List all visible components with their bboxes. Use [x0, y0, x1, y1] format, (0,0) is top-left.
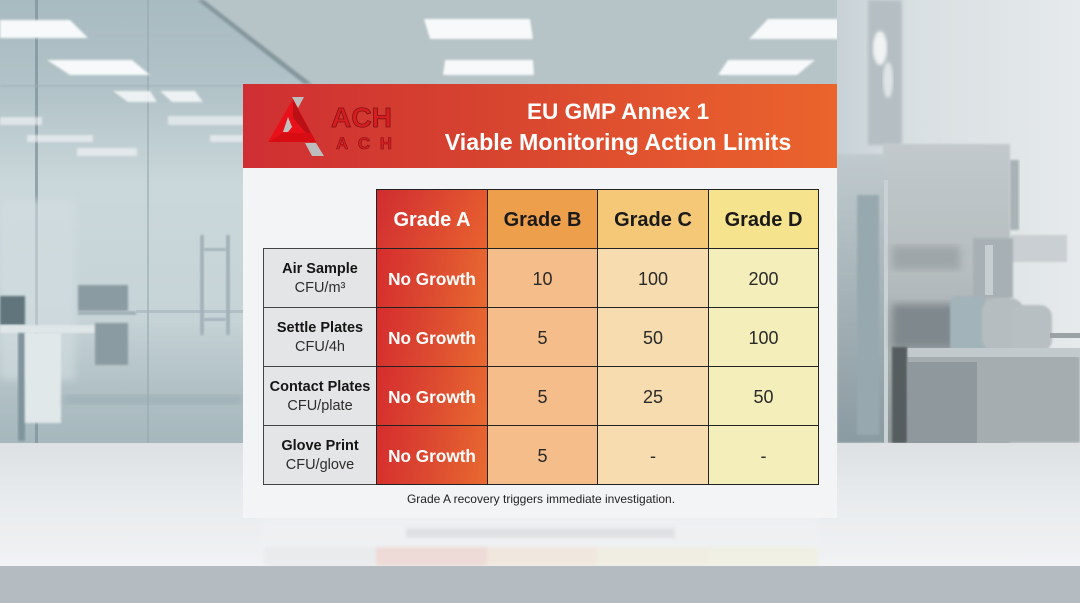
row: Settle Plates: [263, 308, 819, 366]
footnote: Grade A recovery triggers immediate investigation.: [407, 492, 675, 506]
right room and machinery: [837, 0, 1080, 443]
row: Contact Plates: CFU/plate: [287, 398, 353, 414]
row: Air Sample: 100: [638, 268, 668, 288]
logo: ACH: ACH: [336, 134, 392, 153]
logo: ACH: ACH: [331, 102, 392, 133]
row: Contact Plates: No Growth: [388, 386, 476, 406]
row: Contact Plates: 25: [643, 386, 663, 406]
row: Air Sample: Air Sample: [282, 261, 358, 277]
row: Air Sample: [263, 248, 819, 307]
counter front edge: [0, 566, 1080, 603]
logo: ACH: [268, 97, 392, 156]
subtitle: Viable Monitoring Action Limits: [445, 129, 791, 155]
row: Settle Plates: 100: [748, 328, 779, 348]
row: Air Sample: CFU/m³: [295, 280, 345, 296]
column headers: Grade D: [725, 208, 802, 230]
row: Glove Print: -: [760, 446, 766, 466]
panel: action limits card: [243, 84, 837, 518]
column headers: Grade A: [393, 208, 471, 230]
row: Glove Print: CFU/glove: [286, 457, 354, 473]
row: Glove Print: [263, 426, 819, 485]
row: Settle Plates: No Growth: [388, 328, 476, 348]
column headers: Grade C: [614, 208, 692, 230]
row: Contact Plates: 5: [537, 386, 548, 406]
column headers: [376, 189, 819, 248]
column headers: Grade B: [504, 208, 581, 230]
row: Settle Plates: 5: [537, 328, 548, 348]
row: Contact Plates: 50: [753, 386, 774, 406]
row: Glove Print: No Growth: [388, 446, 476, 466]
left glass room: [0, 0, 860, 443]
row: Contact Plates: Contact Plates: [270, 379, 370, 395]
row: Air Sample: 10: [532, 268, 553, 288]
row: Air Sample: 200: [748, 268, 779, 288]
row: Settle Plates: 50: [643, 328, 663, 348]
ceiling lights: [0, 19, 867, 156]
row: Glove Print: 5: [537, 446, 548, 466]
row: Contact Plates: [263, 367, 819, 425]
header banner: [243, 84, 837, 168]
row: Settle Plates: CFU/4h: [295, 339, 345, 355]
row: Settle Plates: Settle Plates: [277, 320, 363, 336]
counter top: [0, 443, 1080, 566]
row: Air Sample: No Growth: [388, 268, 476, 288]
row: Glove Print: Glove Print: [281, 438, 359, 454]
panel reflection on counter: [262, 518, 818, 566]
row: Glove Print: -: [650, 446, 656, 466]
title: EU GMP Annex 1: [527, 99, 709, 124]
